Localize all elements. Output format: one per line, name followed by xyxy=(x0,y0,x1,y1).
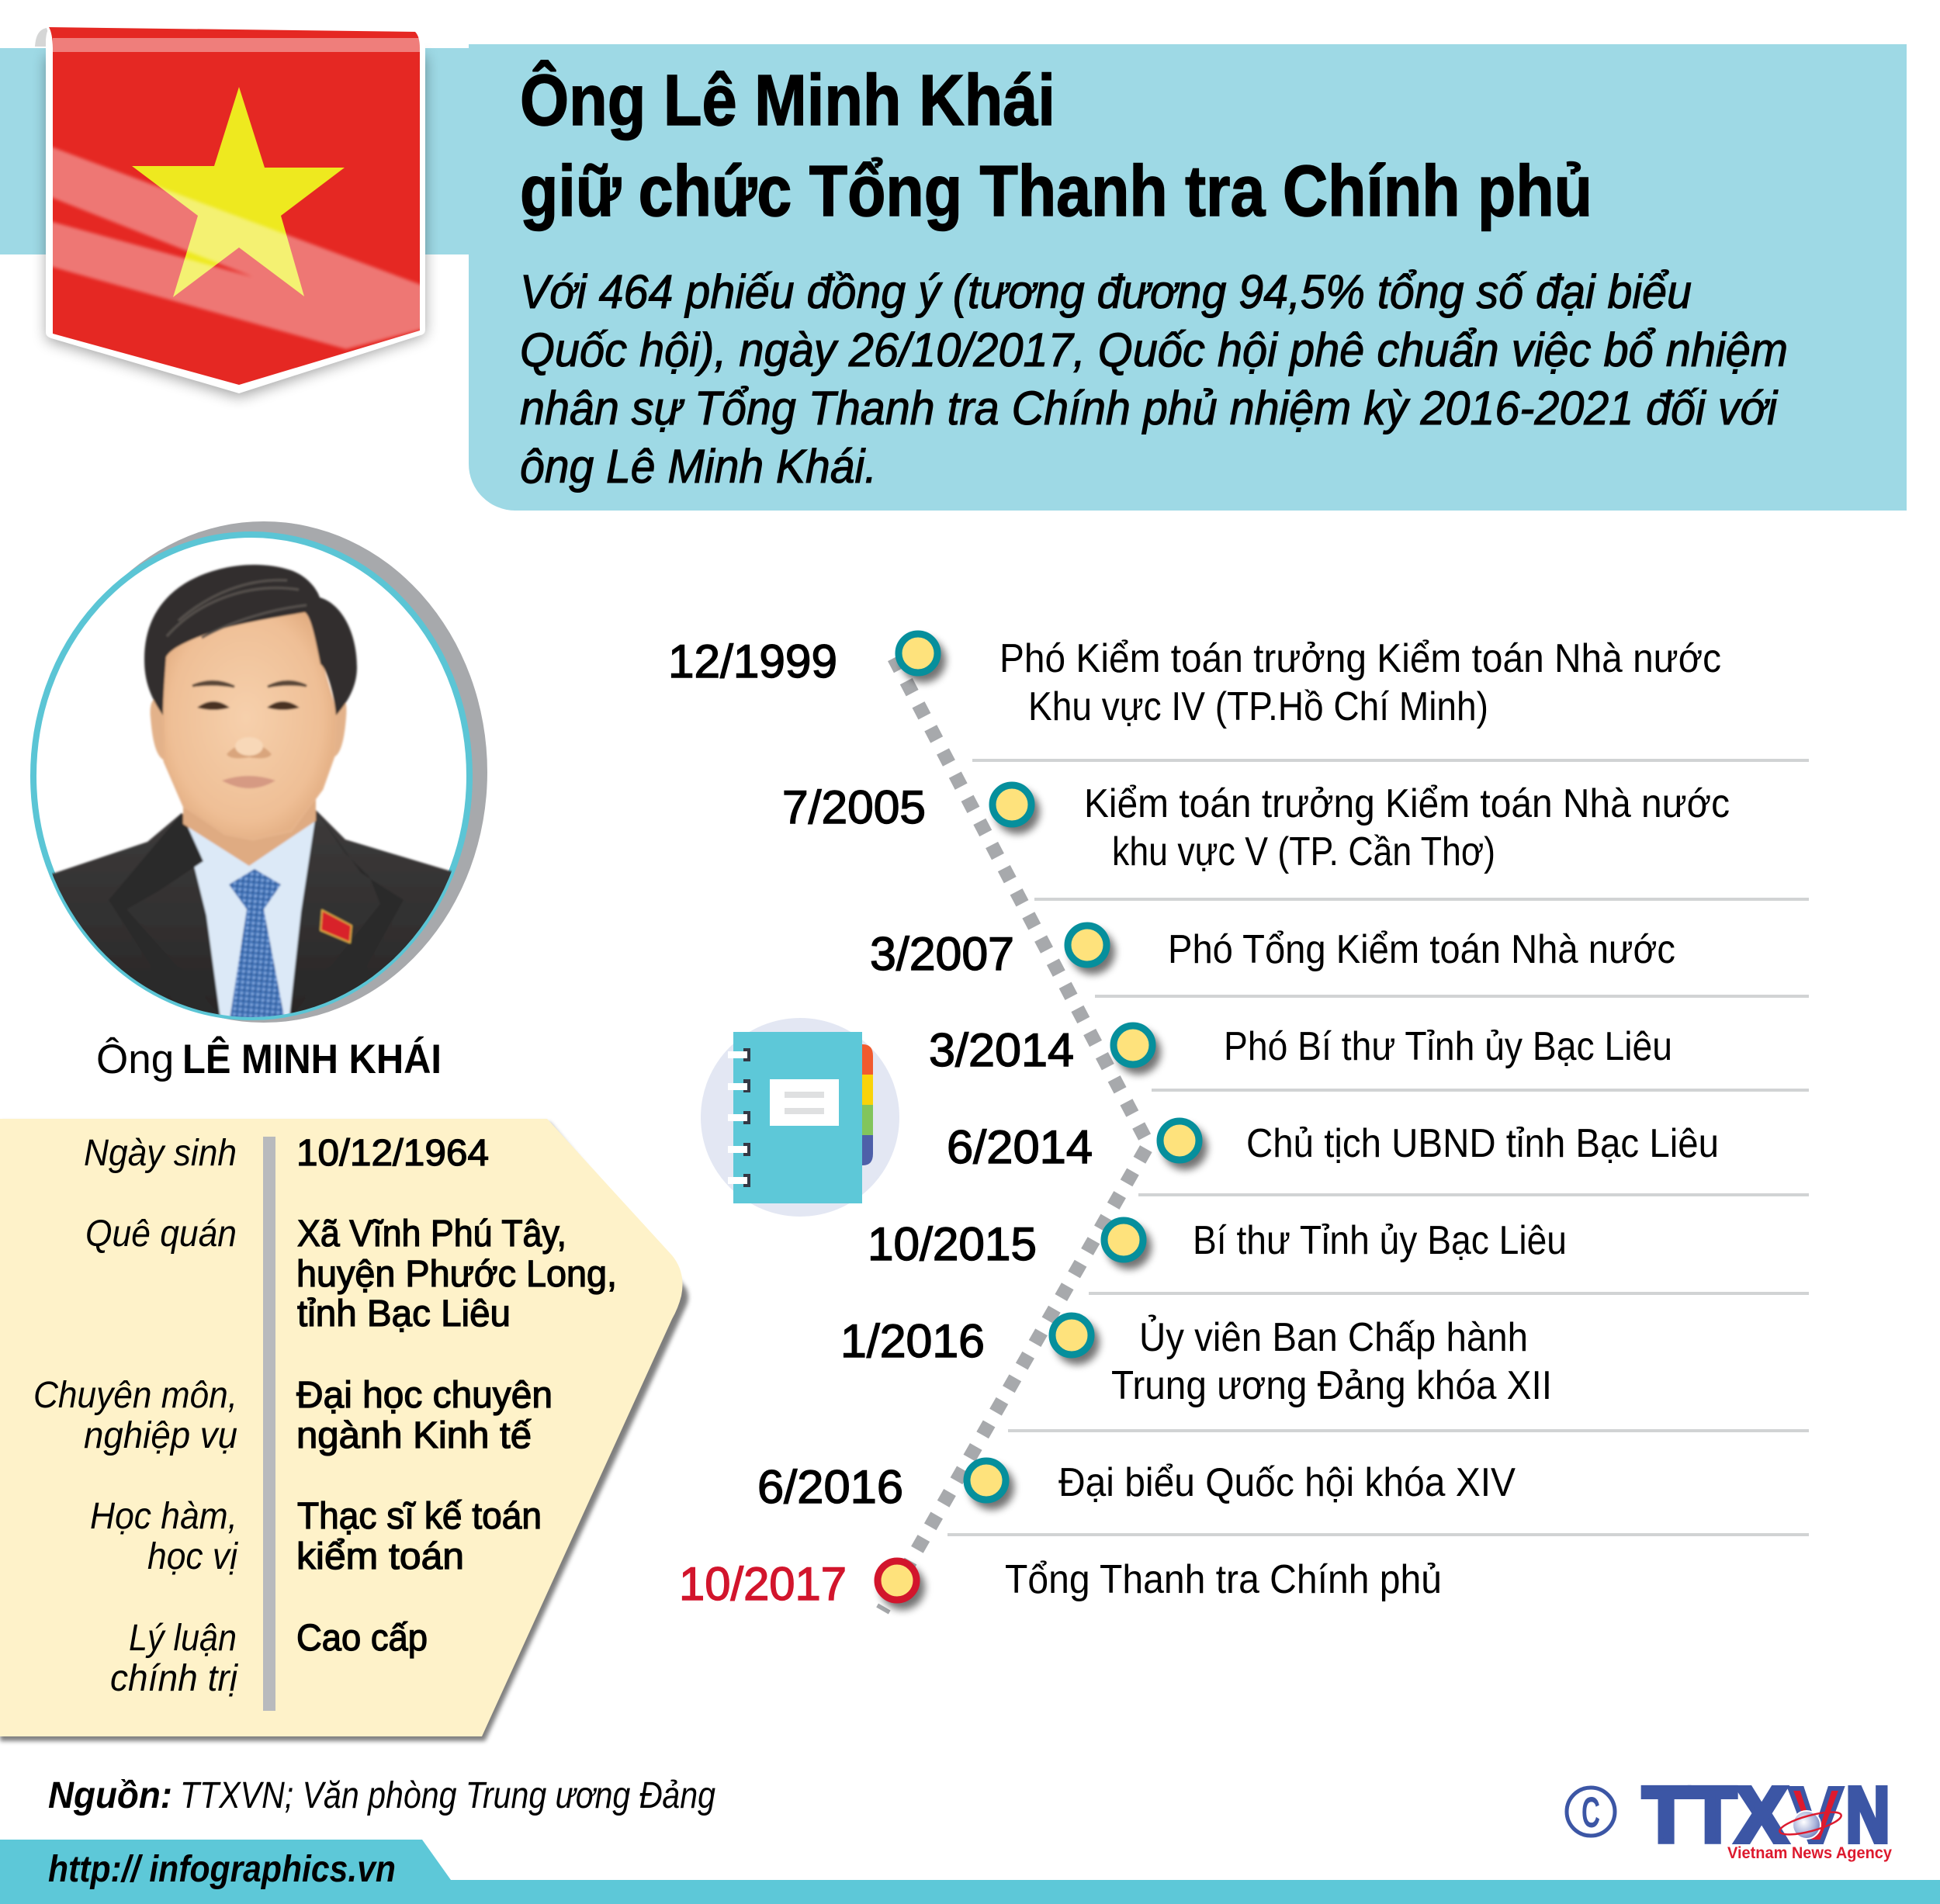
values: Cao cấp xyxy=(296,1618,428,1659)
flag star xyxy=(132,87,345,297)
values: kiểm toán xyxy=(296,1536,464,1577)
values: ngành Kinh tế xyxy=(296,1415,532,1456)
mouth xyxy=(222,776,275,788)
name caption: Ông xyxy=(96,1037,174,1082)
lapel shading xyxy=(110,814,205,903)
timeline dates: 7/2005 xyxy=(782,781,926,833)
labels: Quê quán xyxy=(85,1213,237,1255)
values: tỉnh Bạc Liêu xyxy=(297,1293,511,1335)
portrait xyxy=(31,521,487,1032)
title xyxy=(520,60,1592,231)
timeline dates: 10/2015 xyxy=(868,1218,1037,1270)
labels: Ngày sinh xyxy=(84,1133,237,1174)
labels: Học hàm, xyxy=(90,1496,237,1537)
separators xyxy=(947,760,1809,1535)
labels: nghiệp vụ xyxy=(84,1415,237,1456)
timeline dates: 6/2016 xyxy=(757,1461,903,1513)
timeline dates xyxy=(668,635,1093,1610)
panel: personal details xyxy=(0,1119,688,1741)
icon: flag ribbon xyxy=(35,27,427,397)
header band left xyxy=(0,48,481,254)
timeline dates: 3/2007 xyxy=(870,928,1014,980)
intro text: Với 464 phiếu đồng ý (tương đương 94,5% tổng số đại biểu xyxy=(520,265,1692,318)
timeline dates: 10/2017 xyxy=(679,1558,847,1610)
timeline descriptions: Đại biểu Quốc hội khóa XIV xyxy=(1058,1460,1516,1505)
intro text: ông Lê Minh Khái. xyxy=(520,440,877,493)
logo: TTXVN xyxy=(1643,1772,1892,1862)
timeline descriptions: Tổng Thanh tra Chính phủ xyxy=(1005,1557,1442,1602)
ears xyxy=(151,698,165,760)
labels: Lý luận xyxy=(129,1618,237,1659)
timeline markers xyxy=(878,634,1199,1600)
values: Thạc sĩ kế toán xyxy=(297,1496,542,1537)
suit xyxy=(51,809,452,1015)
logo: TTXVN: TTX xyxy=(1643,1772,1787,1859)
intro text: Quốc hội), ngày 26/10/2017, Quốc hội phê chuẩn việc bổ nhiệm xyxy=(520,324,1788,376)
timeline dates: 6/2014 xyxy=(947,1121,1093,1173)
footer band xyxy=(0,1840,1940,1904)
values: huyện Phước Long, xyxy=(296,1254,617,1295)
icon: notebook xyxy=(701,1018,899,1217)
shirt xyxy=(182,815,316,1024)
neck xyxy=(183,791,316,866)
timeline descriptions: Phó Tổng Kiểm toán Nhà nước xyxy=(1168,927,1675,972)
title: Ông Lê Minh Khái xyxy=(520,60,1055,140)
intro text xyxy=(520,265,1788,493)
footer url: http:// infographics.vn xyxy=(48,1849,396,1890)
logo: TTXVN: V xyxy=(1789,1772,1842,1859)
timeline descriptions: Ủy viên Ban Chấp hành xyxy=(1139,1314,1528,1360)
logo: TTXVN: N xyxy=(1846,1772,1890,1859)
eyes xyxy=(197,701,230,710)
source note: TTXVN; Văn phòng Trung ương Đảng xyxy=(180,1775,715,1816)
face xyxy=(163,605,336,839)
values: Xã Vĩnh Phú Tây, xyxy=(297,1213,566,1255)
labels: học vị xyxy=(147,1536,238,1577)
icon: copyright xyxy=(1567,1788,1615,1836)
values xyxy=(296,1133,617,1659)
timeline descriptions: Trung ương Đảng khóa XII xyxy=(1111,1363,1552,1408)
nose xyxy=(227,746,272,759)
title: giữ chức Tổng Thanh tra Chính phủ xyxy=(520,151,1592,231)
timeline dates: 3/2014 xyxy=(929,1024,1074,1076)
lapel badge xyxy=(320,910,352,943)
intro text: nhân sự Tổng Thanh tra Chính phủ nhiệm kỳ 2016-2021 đối với xyxy=(520,382,1778,434)
values: Đại học chuyên xyxy=(296,1375,553,1416)
icon: copyright: C xyxy=(1581,1788,1600,1836)
timeline marker shadows xyxy=(880,638,1207,1610)
timeline dotted path xyxy=(882,658,1148,1611)
eyebrows xyxy=(192,681,234,687)
timeline descriptions: Bí thư Tỉnh ủy Bạc Liêu xyxy=(1193,1218,1567,1263)
source note: Nguồn: xyxy=(48,1775,172,1816)
timeline descriptions: Phó Kiểm toán trưởng Kiểm toán Nhà nước xyxy=(999,636,1721,681)
timeline descriptions: khu vực V (TP. Cần Thơ) xyxy=(1112,829,1495,874)
timeline dates: 1/2016 xyxy=(840,1315,985,1367)
logo tagline: Vietnam News Agency xyxy=(1727,1844,1892,1862)
labels xyxy=(33,1133,238,1699)
timeline descriptions: Khu vực IV (TP.Hồ Chí Minh) xyxy=(1028,684,1488,729)
header panel xyxy=(469,44,1907,511)
timeline descriptions xyxy=(999,636,1730,1602)
timeline descriptions: Kiểm toán trưởng Kiểm toán Nhà nước xyxy=(1084,781,1730,826)
labels: Chuyên môn, xyxy=(33,1375,237,1416)
values: 10/12/1964 xyxy=(296,1133,489,1174)
labels: chính trị xyxy=(110,1658,238,1699)
timeline descriptions: Phó Bí thư Tỉnh ủy Bạc Liêu xyxy=(1224,1024,1672,1069)
name caption xyxy=(96,1035,442,1082)
timeline dates: 12/1999 xyxy=(668,635,837,687)
hair xyxy=(144,565,357,715)
timeline descriptions: Chủ tịch UBND tỉnh Bạc Liêu xyxy=(1246,1121,1719,1166)
name caption: LÊ MINH KHÁI xyxy=(182,1035,442,1082)
tie xyxy=(229,869,286,1024)
